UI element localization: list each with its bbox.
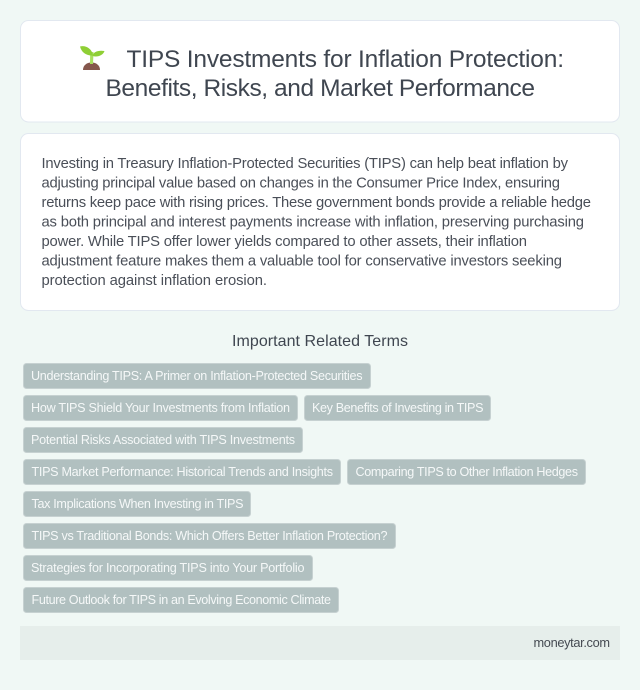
tag: tax implications bbox=[24, 492, 250, 516]
tag: understanding TIPS bbox=[24, 364, 370, 388]
tag: TIPS vs traditional bonds bbox=[24, 524, 396, 548]
tag: TIPS vs traditional bonds: TIPS vs Traditional Bonds: Which Offers Better Inflation Protection? bbox=[32, 529, 388, 543]
title: TIPS Investments for Inflation Protection: bbox=[126, 46, 564, 73]
tag: potential risks: Potential Risks Associated with TIPS Investments bbox=[31, 433, 295, 447]
panel: related term tags bbox=[24, 364, 586, 612]
text block: description: adjustment feature makes them a valuable tool for conservative investors seeking bbox=[42, 254, 562, 270]
heading: related terms: Important Related Terms bbox=[232, 333, 408, 350]
tag: strategies: Strategies for Incorporating TIPS into Your Portfolio bbox=[31, 561, 304, 575]
text block: description: Investing in Treasury Inflation-Protected Securities (TIPS) can help beat inflation by bbox=[42, 156, 569, 172]
tag: future outlook: Future Outlook for TIPS in an Evolving Economic Climate bbox=[32, 593, 331, 607]
tag: comparing TIPS: Comparing TIPS to Other Inflation Hedges bbox=[356, 465, 578, 479]
tag: key benefits: Key Benefits of Investing in TIPS bbox=[312, 401, 484, 415]
text block: description: as both principal and interest payments increase with inflation, preserving purchasing bbox=[42, 214, 584, 230]
panel: title header bbox=[20, 20, 620, 122]
text block: description: power. While TIPS offer lower yields compared to other assets, their inflation bbox=[42, 234, 527, 250]
tag: strategies bbox=[24, 556, 312, 580]
text block: description bbox=[42, 156, 591, 289]
text block: description: returns keep pace with rising prices. These government bonds provide a reliable hedge bbox=[42, 195, 591, 211]
tag: tax implications: Tax Implications When Investing in TIPS bbox=[32, 497, 244, 511]
tag: key benefits bbox=[304, 396, 490, 420]
tag: future outlook bbox=[24, 588, 338, 612]
footer: moneytar.com bbox=[534, 635, 610, 650]
tag: market performance: TIPS Market Performance: Historical Trends and Insights bbox=[32, 465, 333, 479]
tag: how TIPS shield bbox=[24, 396, 298, 420]
tag: understanding TIPS: Understanding TIPS: A Primer on Inflation-Protected Securities bbox=[31, 369, 362, 383]
tag: comparing TIPS bbox=[348, 460, 586, 484]
title: Benefits, Risks, and Market Performance bbox=[106, 75, 535, 102]
icon: sprout bbox=[80, 46, 104, 70]
tag: how TIPS shield: How TIPS Shield Your Investments from Inflation bbox=[31, 401, 290, 415]
text block: description: adjusting principal value based on changes in the Consumer Price Index, ensuring bbox=[42, 176, 560, 192]
tag: potential risks bbox=[24, 428, 302, 452]
tag: market performance bbox=[24, 460, 340, 484]
title bbox=[106, 46, 564, 102]
text block: description: protection against inflation erosion. bbox=[42, 273, 267, 289]
footer bbox=[20, 626, 620, 660]
panel: introduction text bbox=[20, 134, 620, 310]
